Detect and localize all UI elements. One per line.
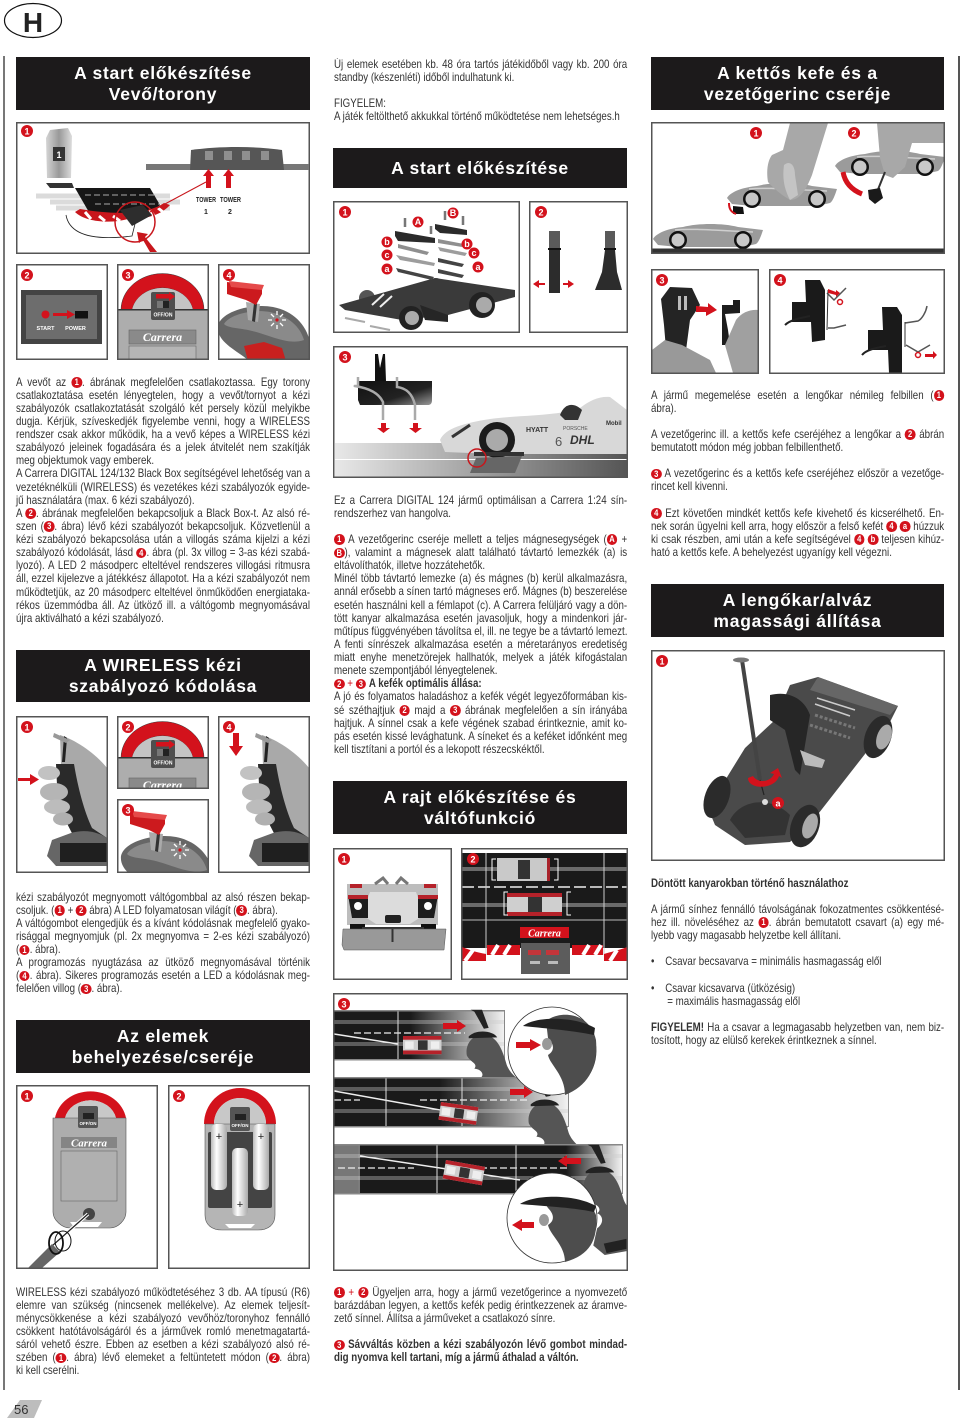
text block: start and lane change notes: barázdában legyen, a kettős kefék pedig érintkezzenek az áramve- bbox=[334, 1299, 627, 1312]
text block: magnets and brushes: 3 bbox=[359, 679, 363, 689]
text block: lever instructions: A vezetőgerinc és a kettős kefe cseréjéhez először a vezetőge- bbox=[664, 467, 944, 480]
text block: battery instructions bbox=[16, 1286, 310, 1377]
text block: lever instructions bbox=[651, 388, 944, 559]
panel: wireless 4 hand: 4 bbox=[226, 722, 232, 732]
text block: magnets and brushes: tött kanyar alkalmazása esetén javasoljuk, hogy a mindenkori jár- bbox=[334, 612, 627, 625]
grid cars bbox=[492, 858, 571, 916]
panel: start 1 car front bbox=[333, 848, 452, 980]
panel: left 4 controller trigger bbox=[218, 264, 310, 360]
text block: magnets and brushes: miatt enyhe menetzörejek hallhatók, melyek a játék kifogástalan bbox=[334, 651, 627, 664]
text block: battery instructions: WIRELESS kézi szabályozó működtetéséhez 3 db. AA típusú (R6) bbox=[16, 1286, 310, 1298]
strip 3 bbox=[334, 1144, 660, 1255]
text block: coding procedure bbox=[16, 890, 310, 995]
text block: banked curves: tosított, hogy az elülső kerekek érintkeznek a sínnel. bbox=[651, 1034, 877, 1047]
text block: magnets and brushes: + A kefék optimális állása: bbox=[347, 677, 482, 690]
panel: battery 2 open compartment: + bbox=[216, 1131, 222, 1143]
car front view bbox=[347, 878, 438, 929]
page number 56: 56 bbox=[14, 1402, 28, 1417]
car bbox=[440, 397, 627, 473]
labels: A bbox=[415, 217, 422, 227]
car: HYATT bbox=[526, 427, 549, 434]
text block: coding procedure: 4 bbox=[22, 971, 27, 981]
text block: receiver connection: szabályozó kódolását, lásd . ábra (pl. 3x villog = 3-as kézi szabá- bbox=[16, 546, 310, 559]
page number 56 bbox=[7, 1400, 42, 1418]
panel: chassis height screw: a bbox=[775, 798, 781, 808]
text block: battery instructions: sáról vehető észre. Ebben az esetben a kézi szabályozó alsó ré- bbox=[16, 1338, 310, 1351]
car: DHL bbox=[570, 433, 595, 447]
text block: banked curves bbox=[651, 876, 944, 1047]
panel: wireless 4 hand bbox=[218, 716, 310, 873]
text block: receiver connection: jű használatára (max. 6 kézi szabályozó). bbox=[16, 494, 195, 507]
text block: magnets and brushes: menete szempontjából lényegtelenek. bbox=[334, 664, 498, 677]
heading: A start előkészítése Vevő/torony bbox=[16, 57, 310, 110]
text block: coding procedure: ( . ábra). bbox=[16, 943, 61, 956]
heading: A lengőkar/alváz magassági állítása bbox=[651, 584, 944, 637]
text block: coding procedure: 2 bbox=[79, 905, 83, 915]
panel: start 3 lane change bbox=[333, 993, 628, 1271]
icon: screwdriver bbox=[733, 658, 768, 805]
heading: A WIRELESS kézi szabályozó kódolása bbox=[16, 650, 310, 702]
text block: start and lane change notes: Sávváltás közben a kézi szabályozón lévő gombot mindad- bbox=[348, 1338, 627, 1351]
text block: start and lane change notes: 1 bbox=[337, 1287, 341, 1297]
text block: magnets and brushes: rendszerhez van hangolva. bbox=[334, 507, 451, 520]
panel: left 1 track and tower: 1 bbox=[24, 126, 30, 136]
panel: center 1 chassis and magnets bbox=[333, 201, 520, 333]
text block: receiver connection: vezetéknélküli (WIRELESS) és vezetékes kézi szabályozók egyide- bbox=[16, 480, 310, 494]
text block: magnets and brushes: annál erősebb a sínen tartó mágneses erő. Mágnes (b) beszerelése bbox=[334, 585, 627, 598]
heading: A rajt előkészítése és váltófunkció bbox=[333, 781, 627, 834]
text block: new elements note: FIGYELEM: bbox=[334, 97, 386, 110]
heading: A lengőkar/alváz magassági állítása: A lengőkar/alváz bbox=[723, 590, 872, 610]
text block: magnets and brushes: kell tisztítani a portól és a lekopott részecskéktől. bbox=[334, 743, 545, 756]
text block: banked curves: A jármű sínhez fennálló távolságának fokozatmentes csökkentésé- bbox=[651, 903, 944, 916]
labels bbox=[382, 208, 484, 274]
text block: receiver connection: 2 bbox=[29, 508, 33, 518]
strip 2 bbox=[334, 1077, 605, 1188]
panel: center 3 car on track: 3 bbox=[342, 352, 348, 362]
tower: TOWER bbox=[196, 197, 216, 204]
text block: lever instructions: 2 bbox=[908, 429, 912, 439]
panel: battery 2 open compartment: + bbox=[237, 1199, 243, 1211]
language badge: H bbox=[4, 2, 62, 38]
magnifier 1 bbox=[508, 1007, 596, 1095]
panel: wireless 3 trigger: 3 bbox=[125, 806, 131, 816]
text block: magnets and brushes: A fenti sínrészek alkalmazása esetén a méretarányos eredetiség bbox=[334, 638, 627, 651]
panel: right 1 cars being lifted bbox=[651, 122, 945, 254]
text block: start and lane change notes bbox=[334, 1286, 627, 1364]
text block: lever instructions: A jármű megemelése esetén a lengőkar némileg felbillen ( bbox=[651, 388, 934, 402]
text block: receiver connection: A vevőt az . ábrának megfelelően csatlakoztassa. Egy torony bbox=[16, 376, 310, 388]
text block: lever instructions: bemutatott módon még jobban felbillenthető. bbox=[651, 441, 843, 454]
text block: coding procedure: A váltógombot elengedjük és a kívánt kódolásnak megfelelő gyako- bbox=[16, 917, 310, 930]
panel: left 2 black box switch: 2 bbox=[24, 270, 30, 280]
heading: A start előkészítése bbox=[333, 148, 627, 188]
panel: right 1 cars being lifted: 2 bbox=[851, 128, 857, 138]
text block: lever instructions: ábra). bbox=[651, 402, 676, 415]
heading: A WIRELESS kézi szabályozó kódolása: A WIRELESS kézi bbox=[84, 655, 242, 675]
tower box bbox=[521, 943, 570, 974]
panel: center 3 car on track bbox=[333, 346, 628, 478]
text block: start and lane change notes: zető sínnel. Állítsa a járműveket a csatlakozó sínre. bbox=[334, 1312, 555, 1325]
text block: lever instructions: nek során ügyelni kell arra, hogy először a felső kefét húzzuk bbox=[651, 520, 944, 533]
text block: magnets and brushes: ), valamint a mágnesek alatt található távtartó lemezkék (a) is bbox=[344, 546, 627, 559]
panel: start 2 top-down grid: 2 bbox=[470, 854, 476, 864]
panel: right 4 double brush bbox=[769, 269, 945, 374]
text block: lever instructions: a bbox=[903, 521, 907, 531]
text block: magnets and brushes: 2 bbox=[337, 679, 341, 689]
text block: receiver connection: A Carrera DIGITAL 124/132 Black Box segítségével lehetőség van a bbox=[16, 467, 310, 480]
panel: wireless 3 trigger bbox=[117, 799, 209, 873]
magnet stack bbox=[395, 211, 467, 280]
text block: receiver connection: rékos üzemmódba áll. Az ütköző ill. a váltógomb megnyomásával bbox=[16, 599, 310, 612]
text block: lever instructions: b bbox=[871, 534, 875, 544]
text block: magnets and brushes: 1 bbox=[337, 534, 341, 544]
tower: 1 bbox=[204, 209, 208, 216]
text block: magnets and brushes: műtípus függvényében távolítsa el, ill. ne tegye be a távtartó lemezt. bbox=[334, 625, 627, 638]
heading: A kettős kefe és a vezetőgerinc cseréje: vezetőgerinc cseréje bbox=[704, 84, 891, 104]
heading: A lengőkar/alváz magassági állítása: magassági állítása bbox=[713, 610, 882, 630]
text block: receiver connection: szabályozó jeleinek fogadására és a jelek átvitelét nem szakítják bbox=[16, 441, 310, 454]
panel: wireless 2 remote switch: 2 bbox=[125, 722, 131, 732]
text block: banked curves: Döntött kanyarokban történő használathoz bbox=[651, 876, 849, 890]
text block: coding procedure: 1 bbox=[58, 905, 62, 915]
text block: magnets and brushes: 2 bbox=[402, 705, 407, 715]
heading: Az elemek behelyezése/cseréje: Az elemek bbox=[117, 1026, 209, 1046]
track base bbox=[342, 929, 446, 950]
text block: coding procedure: ( . ábra). Sikeres programozás esetén a LED a kódolásnak meg- bbox=[16, 969, 310, 982]
text block: receiver connection: szabályozók csatlakoztatását szolgáló két persely közül melyikbe bbox=[16, 402, 310, 415]
text block: lever instructions: ki csak részben, ami után a kefe segítségével teljesen kihúz- bbox=[651, 533, 944, 546]
panel: right 1 cars being lifted: 1 bbox=[753, 128, 759, 138]
text block: start and lane change notes: + Ügyeljen arra, hogy a jármű vezetőgerince a nyomvezető bbox=[348, 1286, 627, 1298]
panel: center 1 chassis and magnets: 1 bbox=[342, 208, 348, 218]
text block: lever instructions: ható a kettős kefe. A behelyezést ugyanígy kell végezni. bbox=[651, 546, 892, 559]
text block: magnets and brushes: Minél több távtartó lemezke (a) és mágnes (b) kerül alkalmazásra, bbox=[334, 572, 627, 585]
text block: banked curves: lyebb vagy magasabb helyzetbe kell állítani. bbox=[651, 929, 841, 942]
panel: battery 2 open compartment bbox=[168, 1085, 310, 1269]
strip 1 bbox=[334, 1010, 543, 1120]
icon: black box bottle: 1 bbox=[56, 150, 62, 160]
text block: lever instructions: 4 bbox=[889, 521, 894, 531]
magnifier 2 bbox=[507, 1173, 597, 1263]
brush detail bbox=[355, 354, 432, 433]
text block: coding procedure: kézi szabályozót megnyomott váltógombbal az alsó részen bekap- bbox=[16, 890, 310, 904]
labels: a bbox=[384, 264, 390, 274]
text block: new elements note: Új elemek esetében kb. 48 óra tartós játékidőből vagy kb. 200 óra bbox=[334, 58, 627, 70]
panel: start 2 top-down grid bbox=[461, 848, 628, 980]
text block: receiver connection: csatlakoztatása esetén lényegtelen, hogy a vevőt/tornyot a kézi bbox=[16, 389, 310, 402]
Carrera badge: Carrera bbox=[528, 928, 561, 940]
tower bbox=[146, 147, 309, 216]
chassis body bbox=[698, 677, 898, 851]
text block: magnets and brushes: hajtjuk. A sínnel csak a kefe végének szabad érintkeznie, amit ko- bbox=[334, 717, 627, 730]
text block: magnets and brushes: Ez a Carrera DIGITAL 124 jármű optimálisan a Carrera 1:24 sín- bbox=[334, 494, 627, 506]
heading: A rajt előkészítése és váltófunkció: A rajt előkészítése és bbox=[384, 786, 576, 806]
car: 6 bbox=[555, 434, 562, 449]
labels: b bbox=[464, 239, 470, 249]
panel: right 3 guide removal: 3 bbox=[659, 276, 665, 286]
step a bbox=[785, 280, 846, 342]
heading: A start előkészítése Vevő/torony: A start előkészítése bbox=[74, 62, 252, 82]
text block: battery instructions: 1 bbox=[59, 1353, 63, 1363]
text block: banked curves: FIGYELEM! Ha a csavar a legmagasabb helyzetben van, nem biz- bbox=[651, 1021, 944, 1034]
text block: receiver connection: 3 bbox=[47, 521, 51, 531]
text block: magnets and brushes: B bbox=[337, 548, 342, 558]
text block: start and lane change notes: dig nyomva kell tartani, míg a jármű áthalad a váltón. bbox=[334, 1351, 579, 1364]
text block: battery instructions: csökkent hatótávolságáról és a járművek romló menetmagatartá- bbox=[16, 1325, 310, 1338]
labels: c bbox=[471, 248, 477, 258]
chassis bbox=[339, 278, 515, 330]
tower: TOWER bbox=[220, 197, 241, 204]
track with curb and receiver bbox=[36, 182, 206, 252]
text block: battery instructions: ki kell cserélni. bbox=[16, 1364, 79, 1377]
text block: start and lane change notes: 3 bbox=[337, 1340, 341, 1350]
text block: magnets and brushes: eltávolíthatók, illetve hozzátehetők. bbox=[334, 559, 485, 572]
panel: battery 2 open compartment: + bbox=[258, 1131, 264, 1143]
text block: coding procedure: A programozás nyugtázása az ütköző megnyomásával történik bbox=[16, 956, 310, 969]
panel: center 2 brushes bbox=[529, 201, 628, 333]
text block: receiver connection: A . ábrának megfelelően bekapcsoljuk a Black Box-t. Az alsó ré- bbox=[16, 507, 310, 520]
brush straight bbox=[533, 231, 574, 293]
text block: coding procedure: 3 bbox=[240, 905, 244, 915]
panel: left 2 black box switch: START bbox=[37, 326, 55, 332]
text block: receiver connection: 1 bbox=[75, 377, 79, 387]
panel: start 3 lane change: 3 bbox=[341, 1000, 347, 1010]
panel: battery 1 remote back: OFF/ON bbox=[80, 1121, 96, 1126]
text block: receiver connection: lyozó). A LED 2 másodperc elteltével rendszeres villogási ritmusra bbox=[16, 559, 310, 572]
panel: left 4 controller trigger: 4 bbox=[226, 270, 232, 280]
text block: receiver connection: meg objektumok vagy emberek. bbox=[16, 454, 154, 467]
text block: magnets and brushes: A jó és folyamatos haladáshoz a kefék végét legyezőformában kis- bbox=[334, 690, 627, 703]
text block: receiver connection bbox=[16, 376, 310, 625]
heading: A kettős kefe és a vezetőgerinc cseréje bbox=[651, 57, 944, 110]
panel: left 2 black box switch bbox=[16, 264, 108, 360]
panel: start 1 car front: 1 bbox=[341, 854, 347, 864]
text block: lever instructions: 4 bbox=[654, 508, 658, 518]
panel: left 2 black box switch: POWER bbox=[65, 326, 86, 332]
labels: B bbox=[450, 208, 457, 218]
text block: receiver connection: dugja. Kérjük, szíveskedjék figyelembe venni, hogy a WIRELESS bbox=[16, 415, 310, 428]
text block: magnets and brushes: A vezetőgerinc cseréje mellett a teljes mágnesegységek ( + bbox=[348, 533, 627, 546]
text block: banked curves: 1 bbox=[761, 917, 766, 927]
text block: receiver connection: szen ( . ábra) lévő kézi szabályozót bekapcsoljuk. Közvetlenül a bbox=[16, 520, 310, 533]
heading: Az elemek behelyezése/cseréje bbox=[16, 1020, 310, 1073]
text block: coding procedure: csoljuk. ( + ábra) A LED folyamatosan világít ( . ábra). bbox=[16, 904, 278, 917]
text block: receiver connection: kézi szabályozó bekapcsolása után a villogás száma kijelzi a kézi bbox=[16, 533, 310, 546]
icon: screwdriver bbox=[28, 1208, 95, 1268]
heading: A kettős kefe és a vezetőgerinc cseréje: A kettős kefe és a bbox=[717, 62, 878, 82]
heading: A WIRELESS kézi szabályozó kódolása: szabályozó kódolása bbox=[69, 676, 257, 696]
text block: new elements note: standby (készenléti) időből indulhatunk ki. bbox=[334, 71, 514, 84]
text block: magnets and brushes: A bbox=[609, 534, 615, 544]
icon: red rotate arrow bbox=[748, 768, 782, 787]
labels: a bbox=[475, 262, 481, 272]
text block: receiver connection: működtetjük, az 20 másodperc elteltével önműködően energiataka- bbox=[16, 586, 310, 598]
labels: b bbox=[384, 237, 390, 247]
panel: chassis height screw: 1 bbox=[659, 656, 665, 666]
lower car bbox=[653, 224, 763, 249]
middle car with hand bbox=[727, 123, 837, 214]
text block: magnets and brushes: 3 bbox=[453, 705, 457, 715]
text block: start and lane change notes: 2 bbox=[361, 1287, 365, 1297]
text block: magnets and brushes: sé széthajtjuk majd a ábrának megfelelően a sín irányába bbox=[334, 704, 627, 716]
text block: coding procedure: 3 bbox=[84, 984, 88, 994]
text block: lever instructions: A vezetőgerinc ill. a kettős kefe cseréjéhez a lengőkar a ábrán bbox=[651, 428, 944, 441]
text block: battery instructions: szében ( . ábra) lévő elemeket a feltüntetett módon ( . ábra) bbox=[16, 1351, 310, 1364]
heading: A start előkészítése: A start előkészítése bbox=[391, 158, 569, 178]
text block: battery instructions: elemre van szükség (nincsenek mellékelve). Az elemek teljesít- bbox=[16, 1299, 310, 1312]
panel: right 3 guide removal bbox=[651, 269, 759, 374]
text block: new elements note: A játék feltölthető akkukkal történő működtetése nem lehetséges.h bbox=[334, 110, 620, 123]
heading: A start előkészítése Vevő/torony: Vevő/torony bbox=[109, 84, 217, 104]
text block: banked curves: hez ill. növeléséhez az . ábrán bemutatott csavart (a) egy mé- bbox=[651, 916, 944, 929]
panel: battery 1 remote back bbox=[16, 1085, 158, 1269]
text block: magnets and brushes: esetén használni kell a fémlapot (c). A Carrera felüljáró vagy a dön- bbox=[334, 598, 627, 612]
heading: A rajt előkészítése és váltófunkció: váltófunkció bbox=[424, 808, 536, 828]
text block: lever instructions: 3 bbox=[654, 469, 658, 479]
text block: lever instructions: 1 bbox=[937, 390, 941, 400]
heading: Az elemek behelyezése/cseréje: behelyezése/cseréje bbox=[72, 1046, 254, 1066]
text block: receiver connection: áll, ezzel kijelezve a játékkész állapotot. Ha a kézi szabályozót nem bbox=[16, 572, 310, 585]
tower: 2 bbox=[228, 209, 232, 216]
labels: c bbox=[384, 250, 390, 260]
panel: wireless 1 hand bbox=[16, 716, 108, 873]
text block: receiver connection: 4 bbox=[139, 548, 143, 558]
car: PORSCHE bbox=[563, 426, 588, 432]
text block: coding procedure: risággal megnyomjuk (pl. 2x megnyomva = 2-es kézi szabályozó) bbox=[16, 930, 310, 943]
text block: banked curves: • Csavar kicsavarva (ütközésig) bbox=[651, 982, 795, 994]
text block: magnets and brushes: pás esetén kissé levághatunk. A síneket és a keféket időnként meg bbox=[334, 730, 627, 743]
language badge: H: H bbox=[23, 7, 43, 38]
panel: battery 2 open compartment: 2 bbox=[176, 1092, 182, 1102]
panel: battery 2 open compartment: OFF/ON bbox=[232, 1123, 248, 1128]
car: Mobil bbox=[606, 421, 622, 427]
text block: lever instructions: 4 bbox=[857, 534, 861, 544]
panel: battery 1 remote back: Carrera bbox=[71, 1138, 108, 1150]
text block: battery instructions: 2 bbox=[272, 1353, 276, 1363]
text block: lever instructions: rincet kell kivenni. bbox=[651, 480, 728, 493]
panel: wireless 1 hand: 1 bbox=[24, 722, 30, 732]
text block: banked curves: • Csavar becsavarva = minimális hasmagasság elől bbox=[651, 955, 881, 968]
panel: left 3 remote switch bbox=[117, 264, 209, 360]
text block: new elements note bbox=[334, 58, 628, 123]
Carrera badge bbox=[520, 927, 569, 940]
text block: coding procedure: felelően villog ( . ábra). bbox=[16, 982, 122, 995]
upper car with hand bbox=[835, 123, 945, 204]
panel: center 2 brushes: 2 bbox=[538, 208, 544, 218]
text block: receiver connection: rendszer csak akkor működik, ha a vevő képes a WIRELESS kézi bbox=[16, 428, 310, 441]
panel: battery 1 remote back: 1 bbox=[24, 1092, 30, 1102]
panel: right 4 double brush: 4 bbox=[777, 276, 783, 286]
panel: left 1 track and tower bbox=[16, 122, 310, 254]
text block: magnets and brushes bbox=[334, 494, 628, 756]
panel: chassis height screw bbox=[651, 650, 945, 861]
panel: left 3 remote switch: 3 bbox=[125, 270, 131, 280]
text block: banked curves: = maximális hasmagasság elől bbox=[667, 995, 800, 1008]
text block: coding procedure: 1 bbox=[22, 944, 27, 954]
icon: black box bottle bbox=[46, 128, 74, 188]
text block: battery instructions: ménycsökkenése a kézi szabályozó vevőhöz/toronyhoz fennálló bbox=[16, 1312, 310, 1325]
panel: wireless 2 remote switch bbox=[117, 716, 209, 789]
step b bbox=[862, 306, 937, 373]
text block: receiver connection: újra aktiválható a kézi szabályozó. bbox=[16, 612, 164, 625]
text block: lever instructions: Ezt követően mindkét kettős kefe kivehető és kicserélhető. En- bbox=[665, 507, 944, 520]
brush fanned bbox=[595, 231, 622, 290]
